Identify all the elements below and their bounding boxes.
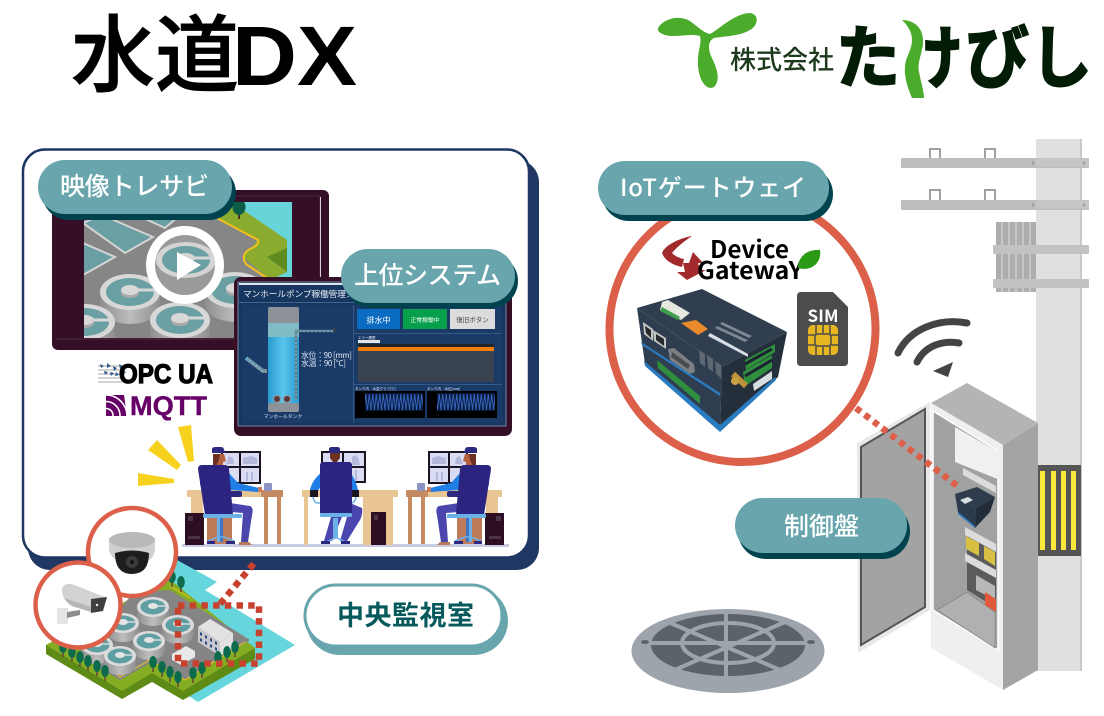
water readings (301, 350, 352, 369)
gateway device (637, 289, 787, 432)
crossarms (901, 149, 1089, 210)
video traceability tablet (52, 190, 329, 354)
label: host system (341, 249, 518, 308)
dotted highlight box (178, 606, 259, 664)
floor line (182, 544, 509, 547)
logo: MQTT: MQTT (130, 391, 208, 421)
button: draining: 排水中 (366, 315, 390, 326)
charts (355, 386, 497, 418)
label: central monitoring room: 中央監視室 (337, 594, 474, 633)
button: draining (357, 309, 400, 329)
label: host system: 上位システム (354, 256, 501, 292)
error log: エラー履歴 (358, 335, 376, 341)
label: central monitoring room (305, 585, 508, 655)
icon: play button (146, 226, 224, 304)
label: IoT gateway: IoTゲートウェイ (620, 168, 806, 203)
open door (857, 402, 930, 653)
camera: dome (88, 508, 176, 596)
terminals (657, 360, 700, 404)
operator center (302, 447, 398, 545)
logo: device gateway (662, 230, 820, 286)
charts: タンク内 水位[mm] (427, 386, 460, 392)
label: IoT gateway (598, 161, 833, 221)
gateway circle (610, 196, 876, 462)
error log (354, 333, 502, 382)
label sticker (753, 371, 772, 391)
ethernet ports (643, 322, 666, 349)
manhole tank diagram: マンホールタンク (264, 413, 302, 420)
vents (699, 350, 721, 378)
manhole cover (632, 609, 824, 693)
company name text: し (1030, 3, 1092, 102)
screen title: マンホールポンプ稼働管理システム (243, 288, 380, 300)
label: video traceability (38, 160, 236, 220)
host system tablet (234, 277, 512, 436)
dotted connector to cabinet (856, 408, 960, 488)
lower equipment (967, 530, 996, 608)
panel: central monitoring (23, 150, 539, 570)
icon: red arrows (662, 236, 706, 280)
title: DX (232, 9, 357, 103)
company logo (658, 3, 1092, 102)
logo: OPC UA: OPC UA (119, 359, 213, 389)
icon: green sprout (658, 13, 757, 88)
camera: bullet (36, 562, 120, 648)
company name text: び (965, 3, 1029, 102)
water readings: 水位：90 [mm] (301, 350, 352, 361)
upper enclosure (955, 427, 1000, 480)
antenna (733, 374, 746, 386)
water readings: 水温：90 [℃] (301, 358, 346, 369)
leaf stroke in logo (902, 20, 924, 98)
icon: SIM card: SIM (808, 302, 838, 327)
transformer (993, 222, 1089, 292)
label: control panel (735, 498, 910, 559)
title (71, 0, 357, 110)
wordmark: Device (710, 230, 789, 265)
label: video traceability: 映像トレサビ (60, 167, 209, 203)
yellow guard sign (1038, 465, 1081, 556)
button: normal operation (403, 309, 447, 329)
dotted connector (220, 561, 256, 604)
button: normal operation: 正常稼働中 (410, 315, 440, 324)
manhole tank diagram (246, 307, 335, 420)
building (172, 619, 233, 665)
mini gateway (955, 487, 995, 528)
button: reset: 復旧ボタン (456, 314, 489, 324)
stickers (660, 300, 690, 320)
company name text: た (836, 3, 900, 102)
operator right (406, 447, 504, 545)
control cabinet (857, 383, 1038, 690)
icon: leaf (798, 250, 820, 269)
button: reset (450, 309, 495, 329)
serial connector (668, 348, 695, 374)
icon: attention rays (138, 425, 194, 486)
company name text (836, 3, 1092, 102)
utility pole (901, 139, 1089, 671)
charts: タンク内 水温グラフ[℃] (355, 386, 396, 392)
label: control panel: 制御盤 (784, 507, 859, 543)
trees (59, 571, 239, 687)
logo: device gateway: GatewaY (697, 251, 804, 286)
icon: wifi signal (898, 322, 967, 377)
operator left (185, 447, 283, 545)
water treatment plant (46, 560, 295, 702)
company name text: け (903, 3, 963, 102)
company type text: 株式会社 (730, 40, 834, 77)
icon: SIM card (797, 292, 848, 366)
